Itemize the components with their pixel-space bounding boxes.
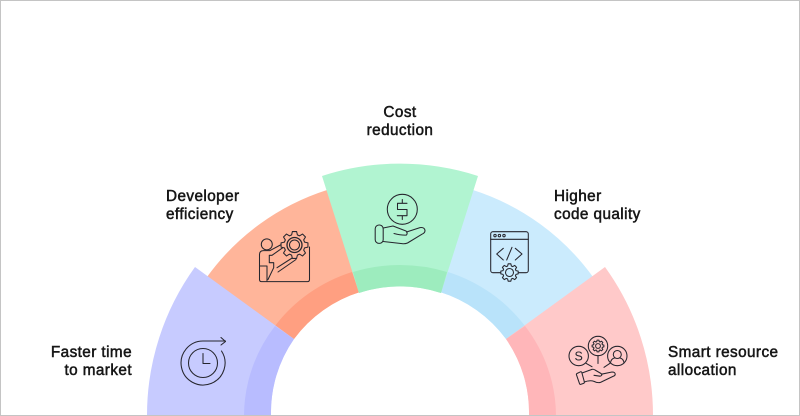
icon: hand with money, settings and people	[569, 336, 627, 384]
label: developer efficiency: Developer	[166, 188, 240, 205]
segment: faster time to market	[147, 267, 294, 416]
label: higher code quality: code quality	[554, 206, 641, 223]
label: cost reduction: reduction	[367, 122, 433, 139]
label: cost reduction: Cost	[383, 104, 417, 121]
icon: hand holding dollar coin	[375, 194, 425, 244]
bottom and frame edge	[0, 414, 800, 416]
label: smart resource allocation: allocation	[668, 362, 737, 379]
label: developer efficiency: efficiency	[166, 206, 234, 223]
segment: cost reduction	[322, 164, 478, 293]
label: higher code quality: Higher	[554, 188, 602, 205]
icon: hand with money, settings and people: S	[575, 350, 583, 364]
segment: higher code quality	[440, 190, 593, 339]
segment: smart resource allocation	[506, 267, 653, 416]
icon: developer turning gear	[260, 232, 310, 282]
icon: code window with gear	[491, 232, 528, 281]
label: faster time to market: to market	[64, 362, 132, 379]
label: faster time to market: Faster time	[51, 344, 132, 361]
segment: developer efficiency	[207, 190, 360, 339]
icon: clock with circular arrow	[181, 338, 226, 385]
label: smart resource allocation: Smart resource	[668, 344, 778, 361]
